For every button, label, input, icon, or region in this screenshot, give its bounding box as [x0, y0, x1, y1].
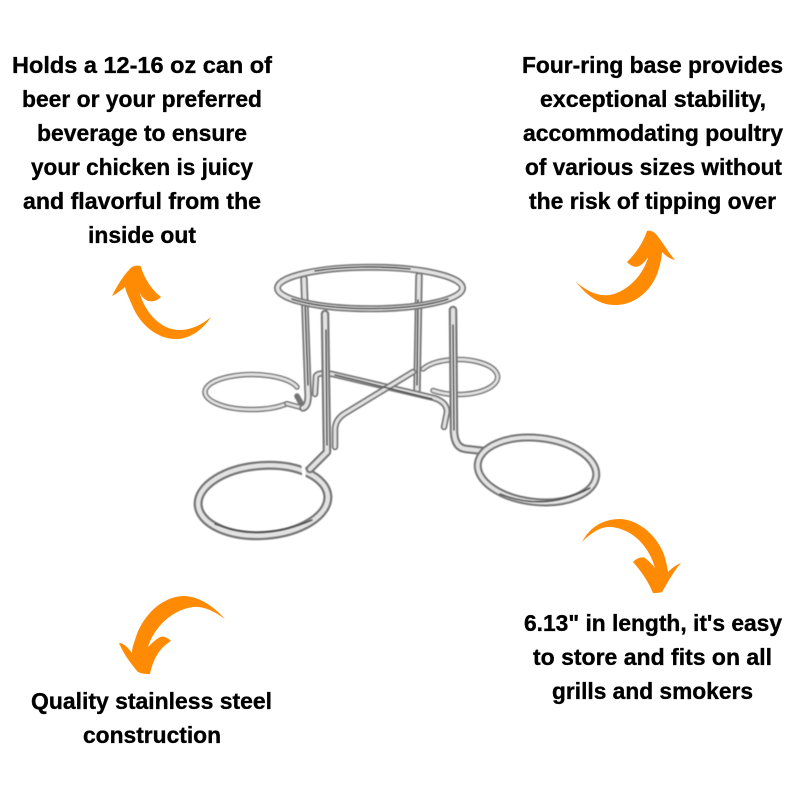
text: stability feature top right: the risk of tipping over	[529, 188, 776, 214]
arrow: bottom right, pointing down	[582, 519, 681, 593]
back left ring	[205, 375, 303, 410]
text: beverage feature top left: beverage to ensure	[37, 120, 247, 146]
front uprights	[310, 310, 484, 469]
text: beverage feature top left: inside out	[88, 222, 196, 248]
front right ring	[474, 432, 600, 508]
text: beverage feature top left	[12, 52, 272, 248]
text: size feature bottom right: grills and smokers	[552, 678, 753, 704]
text: size feature bottom right	[524, 610, 782, 704]
text: stability feature top right: of various sizes without	[525, 154, 782, 180]
text: stability feature top right: Four-ring base provides	[522, 52, 783, 78]
text: material feature bottom left	[31, 688, 272, 748]
text: beverage feature top left: Holds a 12-16 oz can of	[12, 52, 272, 78]
arrow: bottom left, pointing down	[119, 596, 225, 674]
text: stability feature top right: accommodating poultry	[523, 120, 783, 146]
cross braces	[315, 372, 447, 447]
arrow: top left, pointing up	[112, 266, 211, 339]
text: beverage feature top left: your chicken is juicy	[31, 154, 253, 180]
text: size feature bottom right: 6.13" in length, it's easy	[524, 610, 782, 636]
top ring	[278, 267, 462, 309]
text: stability feature top right	[522, 52, 783, 214]
text: beverage feature top left: beer or your preferred	[22, 86, 262, 112]
arrow: top right, pointing up	[576, 231, 675, 305]
text: stability feature top right: exceptional stability,	[540, 86, 766, 112]
front left ring	[196, 460, 330, 540]
text: beverage feature top left: and flavorful from the	[23, 188, 261, 214]
rear uprights	[303, 276, 419, 408]
back right ring	[423, 359, 498, 394]
text: material feature bottom left: construction	[83, 722, 221, 748]
product: stainless steel rack	[196, 267, 600, 540]
text: size feature bottom right: to store and fits on all	[533, 644, 772, 670]
text: material feature bottom left: Quality stainless steel	[31, 688, 272, 714]
